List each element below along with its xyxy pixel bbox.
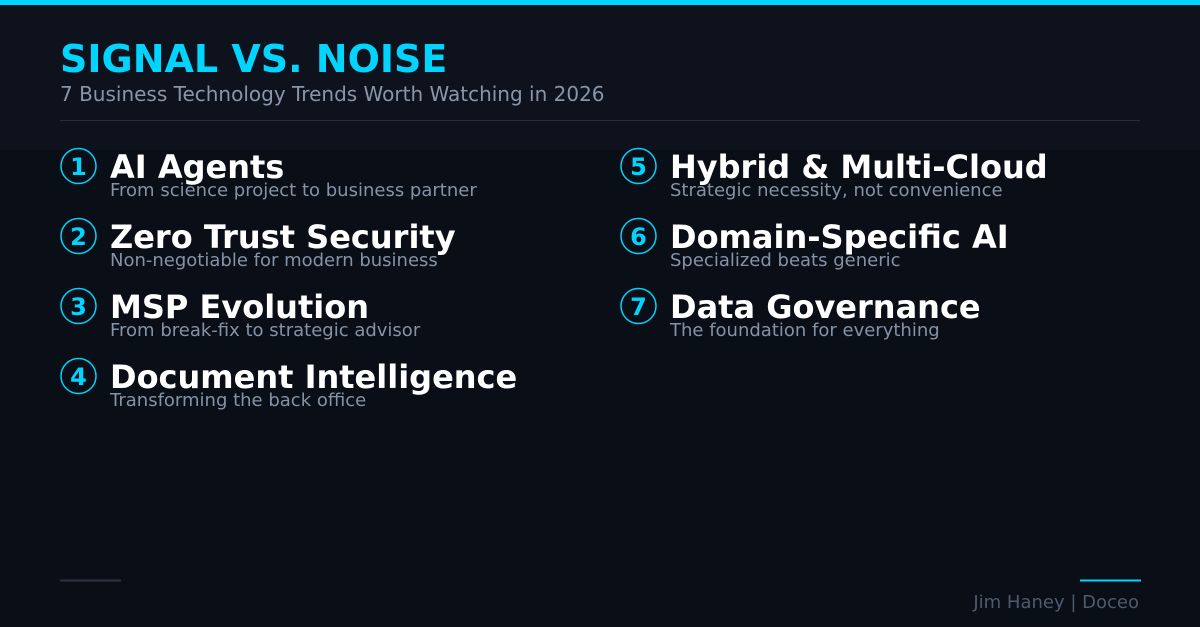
item 1 (61, 148, 477, 201)
item 7: The foundation for everything (669, 320, 940, 341)
item 5: 5 (630, 153, 647, 181)
item 3: 3 (70, 293, 87, 321)
list: right column (621, 148, 1048, 341)
item 7: 7 (630, 293, 647, 321)
item 4 (61, 358, 517, 411)
item 6: Domain-Specific AI (670, 218, 1009, 256)
item 4: 4 (70, 363, 87, 391)
item 5 (621, 148, 1048, 201)
item 7 (621, 288, 981, 341)
item 2: Zero Trust Security (110, 218, 456, 256)
item 2 (61, 218, 456, 271)
item 5: Strategic necessity, not convenience (670, 180, 1003, 201)
top accent bar (0, 0, 1200, 5)
item 1: 1 (70, 153, 87, 181)
item 1: AI Agents (110, 148, 284, 186)
item 6: Specialized beats generic (670, 250, 900, 271)
item 1: From science project to business partner (110, 180, 477, 201)
item 4: Transforming the back office (109, 390, 366, 411)
item 3 (61, 288, 421, 341)
item 6 (621, 218, 1009, 271)
item 3: From break-fix to strategic advisor (110, 320, 421, 341)
item 2: Non-negotiable for modern business (110, 250, 438, 271)
item 3: MSP Evolution (110, 288, 369, 326)
item 2: 2 (70, 223, 87, 251)
item 6: 6 (630, 223, 647, 251)
footer credit: Jim Haney | Doceo (972, 592, 1139, 613)
title: SIGNAL VS. NOISE (60, 37, 447, 81)
item 7: Data Governance (670, 288, 981, 326)
subtitle: 7 Business Technology Trends Worth Watching in 2026 (60, 82, 605, 106)
item 5: Hybrid & Multi-Cloud (670, 148, 1048, 186)
footer accent line (1080, 580, 1141, 582)
item 4: Document Intelligence (110, 358, 517, 396)
list: left column (61, 148, 517, 411)
